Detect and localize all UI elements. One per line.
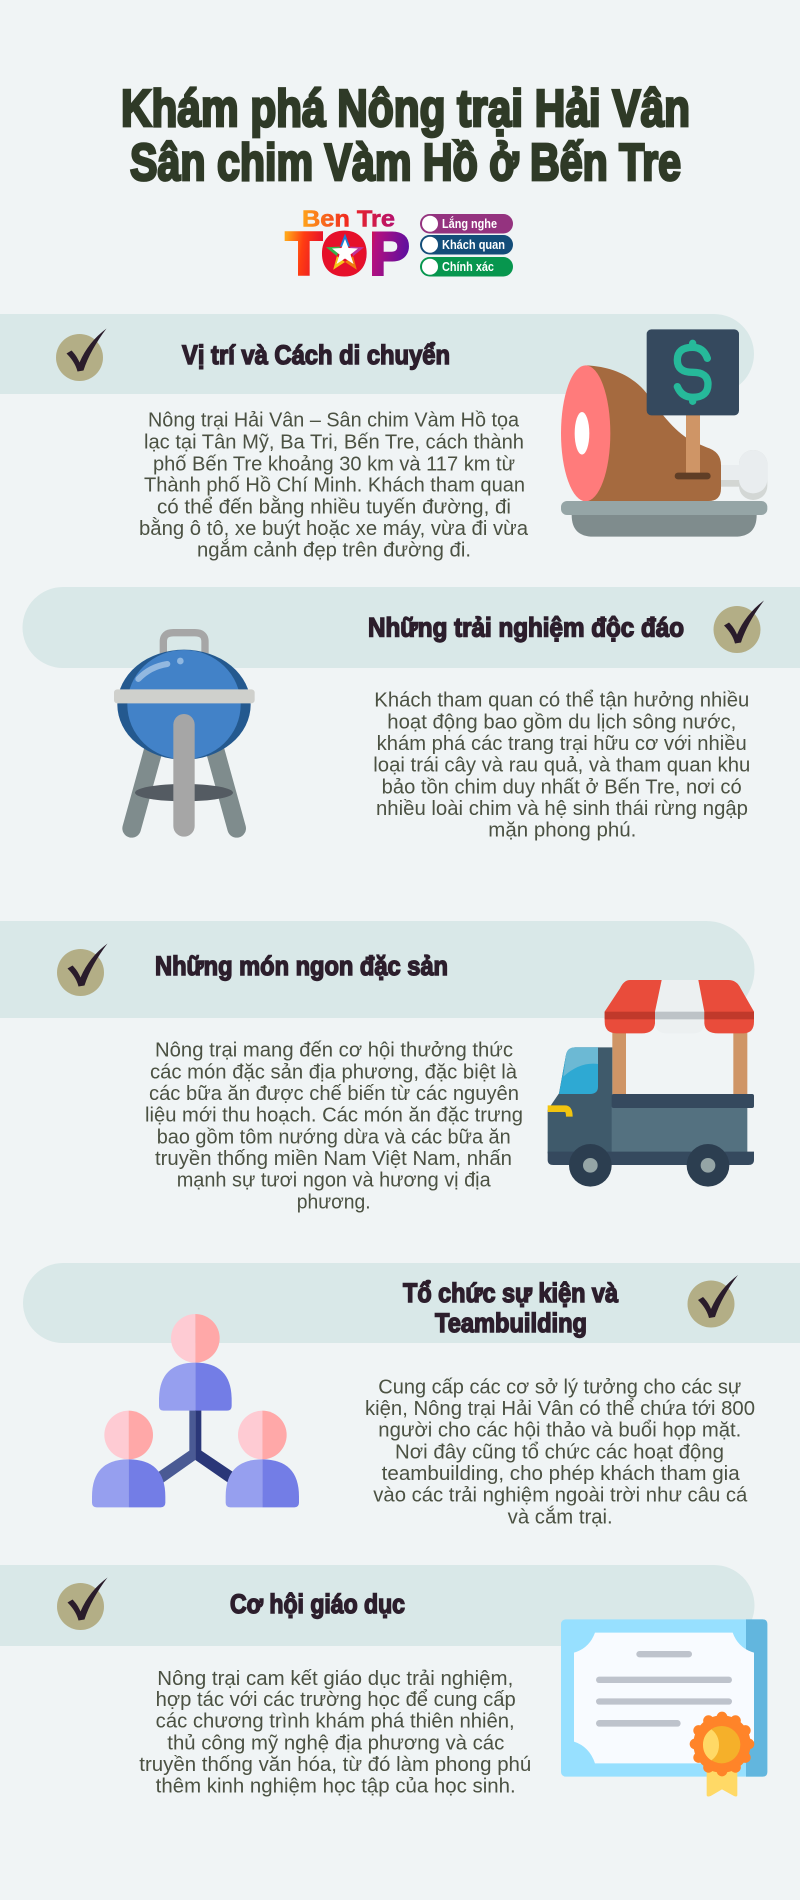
icon: certificate with seal (561, 1619, 767, 1796)
icon: check mark 5 (57, 1578, 108, 1630)
text block: education: thủ công mỹ nghệ địa phương và các (167, 1732, 504, 1754)
text block: education: Nông trại cam kết giáo dục trải nghiệm, (157, 1668, 513, 1690)
text block: location: phố Bến Tre khoảng 30 km và 117 km từ (153, 453, 515, 475)
logo: Ben Tre Top: Lắng nghe (442, 216, 497, 231)
panel: events and teambuilding (23, 1263, 800, 1528)
logo: Ben Tre Top: TOP (286, 220, 410, 288)
icon: ham with price sign (561, 329, 767, 537)
heading: events: Teambuilding (435, 1308, 587, 1338)
text block: experiences: bảo tồn chim duy nhất ở Bến Tre, nơi có (382, 776, 742, 798)
text block: experiences: nhiều loài chim và hệ sinh thái rừng ngập (376, 798, 748, 820)
text block: specialties: mạnh sự tươi ngon và hương vị địa (177, 1170, 492, 1192)
text block: location: ngắm cảnh đẹp trên đường đi. (197, 539, 471, 562)
text block: location: lạc tại Tân Mỹ, Ba Tri, Bến Tre, cách thành (144, 431, 524, 453)
band: section 2 (23, 587, 800, 668)
text block: events (365, 1376, 755, 1528)
panel: unique experiences (23, 587, 800, 842)
text block: events: Nơi đây cũng tổ chức các hoạt động (395, 1441, 724, 1463)
text block: events: teambuilding, cho phép khách tham gia (382, 1463, 741, 1485)
text block: experiences: hoạt động bao gồm du lịch sông nước, (387, 711, 736, 733)
icon: team network (92, 1314, 299, 1507)
band: section 1 (0, 314, 754, 394)
text block: location: Thành phố Hồ Chí Minh. Khách tham quan (144, 475, 525, 497)
text block: events: Cung cấp các cơ sở lý tưởng cho các sự (378, 1376, 741, 1398)
panel: location and travel (0, 314, 767, 562)
heading: specialties: Những món ngon đặc sản (155, 951, 448, 981)
text block: education (139, 1668, 531, 1797)
logo: Ben Tre Top: Chính xác (442, 260, 494, 274)
text block: location: có thể đến bằng nhiều tuyến đường, đi (157, 496, 511, 519)
text block: education: hợp tác với các trường học để cung cấp (156, 1689, 516, 1711)
text block: education: truyền thống văn hóa, từ đó làm phong phú (139, 1754, 531, 1776)
text block: events: vào các trải nghiệm ngoài trời như câu cá (373, 1485, 748, 1507)
text block: experiences: mặn phong phú. (488, 820, 636, 842)
text block: location: bằng ô tô, xe buýt hoặc xe máy, vừa đi vừa (139, 517, 529, 540)
text block: specialties: các món đặc sản địa phương, đặc biệt là (150, 1061, 518, 1083)
text block: events: kiện, Nông trại Hải Vân có thể chứa tới 800 (365, 1398, 755, 1420)
text block: experiences: loại trái cây và rau quả, và tham quan khu (373, 755, 750, 777)
logo: Ben Tre Top: Khách quan (442, 238, 505, 252)
text block: specialties: phương. (297, 1191, 371, 1213)
text block: specialties: các bữa ăn được chế biến từ các nguyên (149, 1083, 519, 1105)
text block: specialties: truyền thống miền Nam Việt Nam, nhấn (155, 1148, 512, 1170)
title (121, 80, 690, 192)
icon: check mark 3 (57, 944, 108, 996)
heading: events (403, 1278, 619, 1338)
text block: experiences (373, 690, 750, 842)
band: section 5 (0, 1565, 754, 1646)
logo: Ben Tre Top (286, 206, 513, 288)
panel: local specialties (0, 921, 754, 1213)
title: Khám phá Nông trại Hải Vân (121, 80, 690, 138)
text block: education: các chương trình khám phá thiên nhiên, (156, 1711, 515, 1733)
heading: events: Tổ chức sự kiện và (403, 1278, 619, 1308)
heading: location: Vị trí và Cách di chuyển (182, 340, 450, 370)
band: section 4 (23, 1263, 800, 1343)
icon: check mark 1 (56, 328, 106, 381)
heading: education: Cơ hội giáo dục (230, 1589, 405, 1619)
text block: events: và cắm trại. (508, 1505, 613, 1528)
text block: experiences: khám phá các trang trại hữu cơ với nhiều (377, 733, 747, 755)
text block: location (139, 410, 529, 562)
logo: Ben Tre Top: Ben Tre (302, 206, 395, 232)
text block: specialties: Nông trại mang đến cơ hội thưởng thức (155, 1040, 513, 1062)
heading: experiences: Những trải nghiệm độc đáo (368, 613, 684, 643)
text block: events: người cho các hội thảo và buổi họp mặt. (378, 1420, 741, 1442)
icon: barbecue grill (114, 633, 255, 837)
text block: location: Nông trại Hải Vân – Sân chim Vàm Hồ tọa (148, 410, 520, 432)
text block: education: thêm kinh nghiệm học tập của học sinh. (156, 1775, 516, 1797)
icon: check mark 4 (688, 1275, 738, 1328)
text block: specialties: bao gồm tôm nướng dừa và các bữa ăn (157, 1126, 511, 1148)
icon: food truck (548, 980, 754, 1187)
text block: specialties: liệu mới thu hoạch. Các món ăn đặc trưng (145, 1105, 523, 1127)
band: section 3 (0, 921, 754, 1018)
icon: check mark 2 (714, 600, 764, 653)
text block: experiences: Khách tham quan có thể tận hưởng nhiều (374, 690, 749, 712)
text block: specialties (145, 1040, 523, 1213)
panel: education (0, 1565, 767, 1797)
